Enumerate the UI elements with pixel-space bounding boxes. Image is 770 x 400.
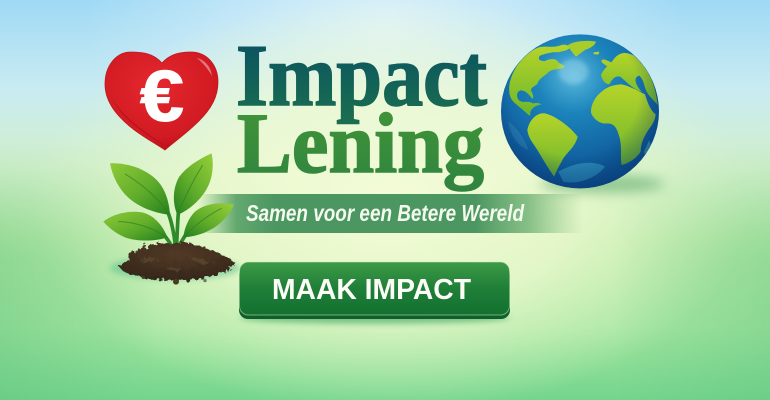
Europe and Asia <box>601 53 658 105</box>
leaf: lower right <box>183 203 234 237</box>
leaf: upper right <box>174 153 213 215</box>
tagline ribbon <box>198 194 583 233</box>
icon: red heart with euro sign <box>105 52 218 150</box>
leaf: upper left <box>110 163 170 215</box>
call-to-action button <box>239 262 510 324</box>
North America <box>509 45 570 116</box>
soil mound <box>120 243 237 281</box>
Pacific light patch <box>508 122 528 150</box>
leaf: lower left <box>103 212 167 241</box>
euro sign: € <box>140 57 184 137</box>
Greenland <box>567 41 596 57</box>
Antarctica <box>558 163 605 183</box>
stems <box>164 213 187 253</box>
Madagascar <box>644 140 651 156</box>
title: Lening: Lening <box>237 95 484 191</box>
Iceland <box>593 52 599 54</box>
title: Impact: Impact <box>236 28 487 125</box>
icon: plant in soil <box>103 153 240 285</box>
South America <box>527 113 578 177</box>
tagline text: Samen voor een Betere Wereld <box>246 200 525 226</box>
icon: globe <box>501 34 664 193</box>
Africa <box>591 84 656 165</box>
button label: MAAK IMPACT <box>272 274 471 306</box>
